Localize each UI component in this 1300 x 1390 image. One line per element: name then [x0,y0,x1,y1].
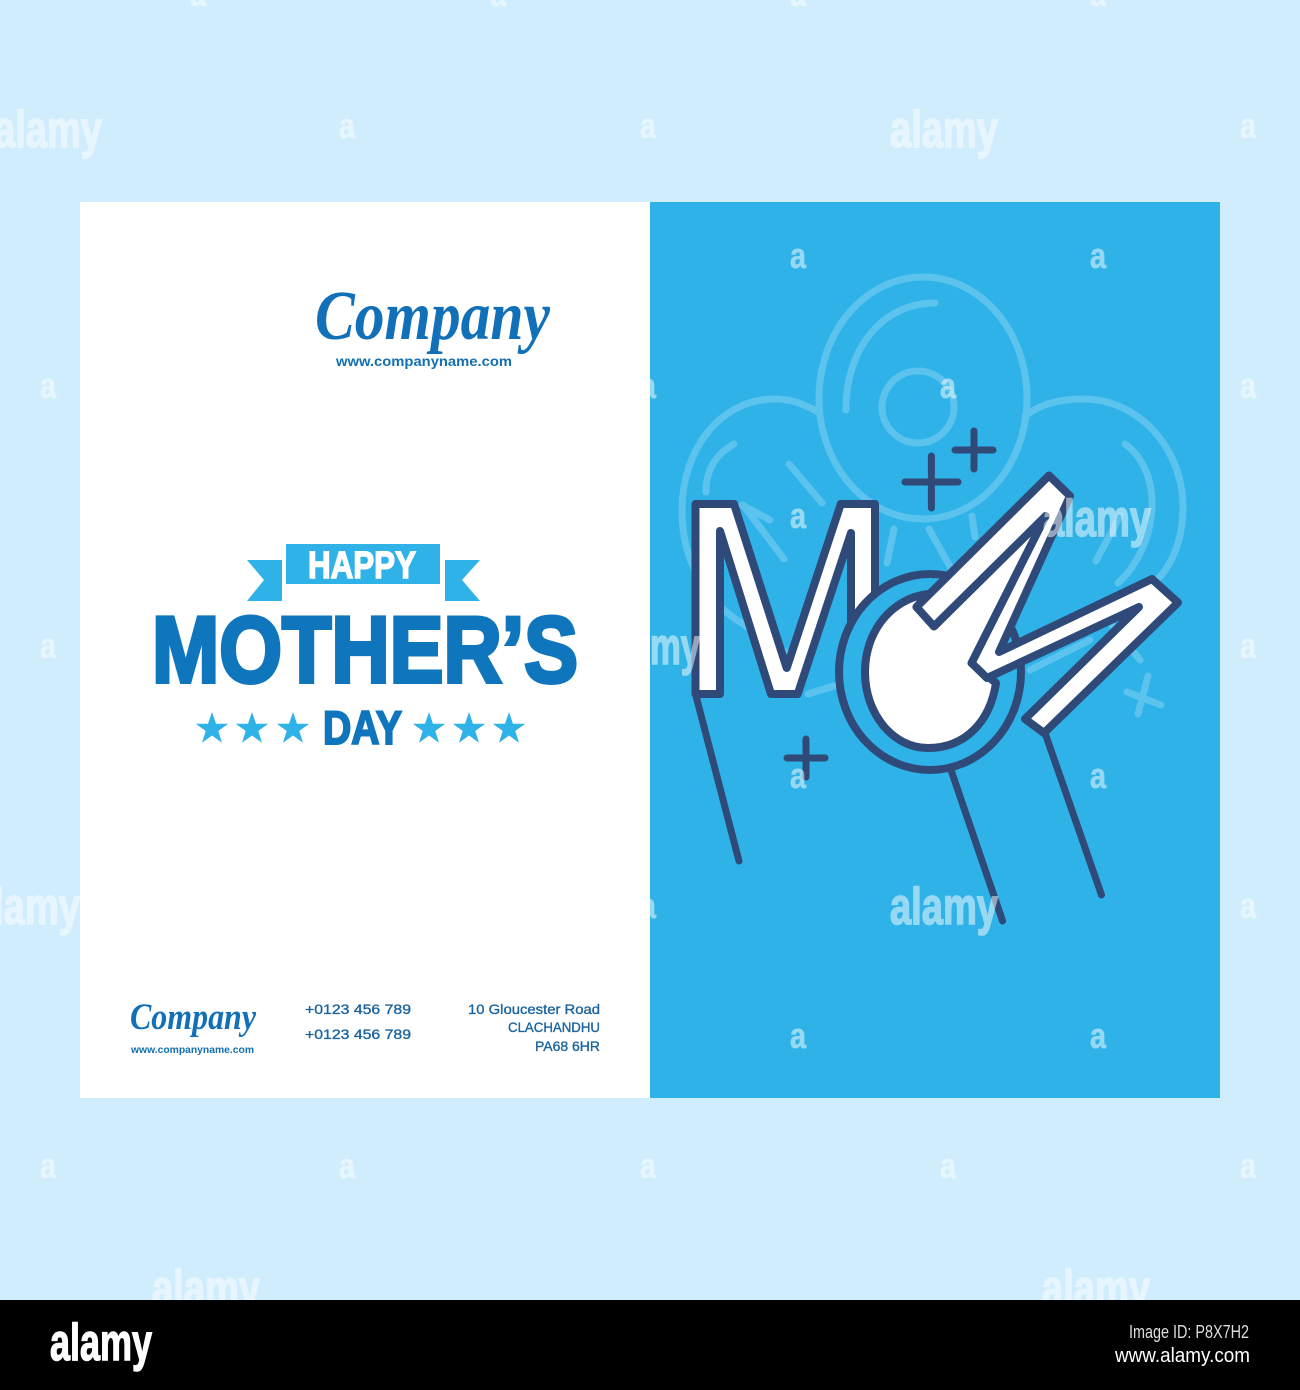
illustration: MOM lettering with balloon strings [696,431,1178,921]
company logo top: Company [315,278,551,355]
watermarks: a [1240,365,1257,406]
watermarks: a [640,885,657,926]
watermarks: alamy [152,1260,260,1318]
watermarks: my [650,618,700,676]
watermarks: a [40,365,57,406]
watermarks: a [1090,755,1107,796]
image id: Image ID: P8X7H2 [1129,1322,1249,1342]
watermarks: alamy [890,101,998,159]
postal address [468,1001,600,1054]
alamy logo: alamy [50,1314,152,1372]
footer logo: Company [130,997,256,1038]
panel: blue illustration side [650,202,1220,1098]
letter O ring [839,574,1021,770]
watermarks: a [1240,1145,1257,1186]
watermarks: a [1240,105,1257,146]
watermarks: a [790,235,807,276]
watermarks: alamy [1043,490,1151,548]
watermarks: a [790,755,807,796]
phone numbers: +0123 456 789 [305,1001,411,1017]
day text: DAY [323,701,402,754]
watermarks: a [1090,235,1107,276]
rotated letter M [916,476,1178,733]
watermarks: alamy [890,878,998,936]
heading: Happy Mother's Day [152,544,578,754]
letter O white centre [865,516,1046,748]
mother's text: MOTHER’S [152,597,578,702]
faint balloons background [682,277,1183,714]
watermarks: a [640,1145,657,1186]
postal address: 10 Gloucester Road [468,1001,600,1017]
postal address: PA68 6HR [535,1038,600,1054]
watermarks: a [1090,1015,1107,1056]
watermarks: a [640,365,657,406]
letter M [696,504,875,700]
watermarks: alamy [1042,1260,1150,1318]
watermarks: a [1240,885,1257,926]
watermarks: a [940,1145,957,1186]
website address top: www.companyname.com [335,354,512,369]
ribbon left tail [247,560,282,601]
watermarks: a [640,105,657,146]
watermarks: a [339,105,356,146]
stars row [196,712,525,743]
balloon strings [696,694,1102,921]
phone numbers: +0123 456 789 [305,1026,411,1042]
panel: white information side [80,202,650,1098]
ribbon centre [286,544,440,584]
ribbon right tail [445,560,480,601]
black footer bar [0,1300,1300,1390]
plus signs [787,431,993,777]
happy text: HAPPY [308,545,416,587]
watermarks: a [940,365,957,406]
watermarks: a [40,625,57,666]
watermarks: a [40,1145,57,1186]
website address footer: www.companyname.com [130,1045,254,1056]
alamy website: www.alamy.com [1114,1345,1250,1367]
watermarks: a [790,1015,807,1056]
footer logo [130,997,256,1056]
postal address: CLACHANDHU [508,1019,600,1035]
watermarks: a [339,1145,356,1186]
phone numbers [305,1001,411,1042]
watermarks: a [1240,625,1257,666]
watermarks: a [790,495,807,536]
